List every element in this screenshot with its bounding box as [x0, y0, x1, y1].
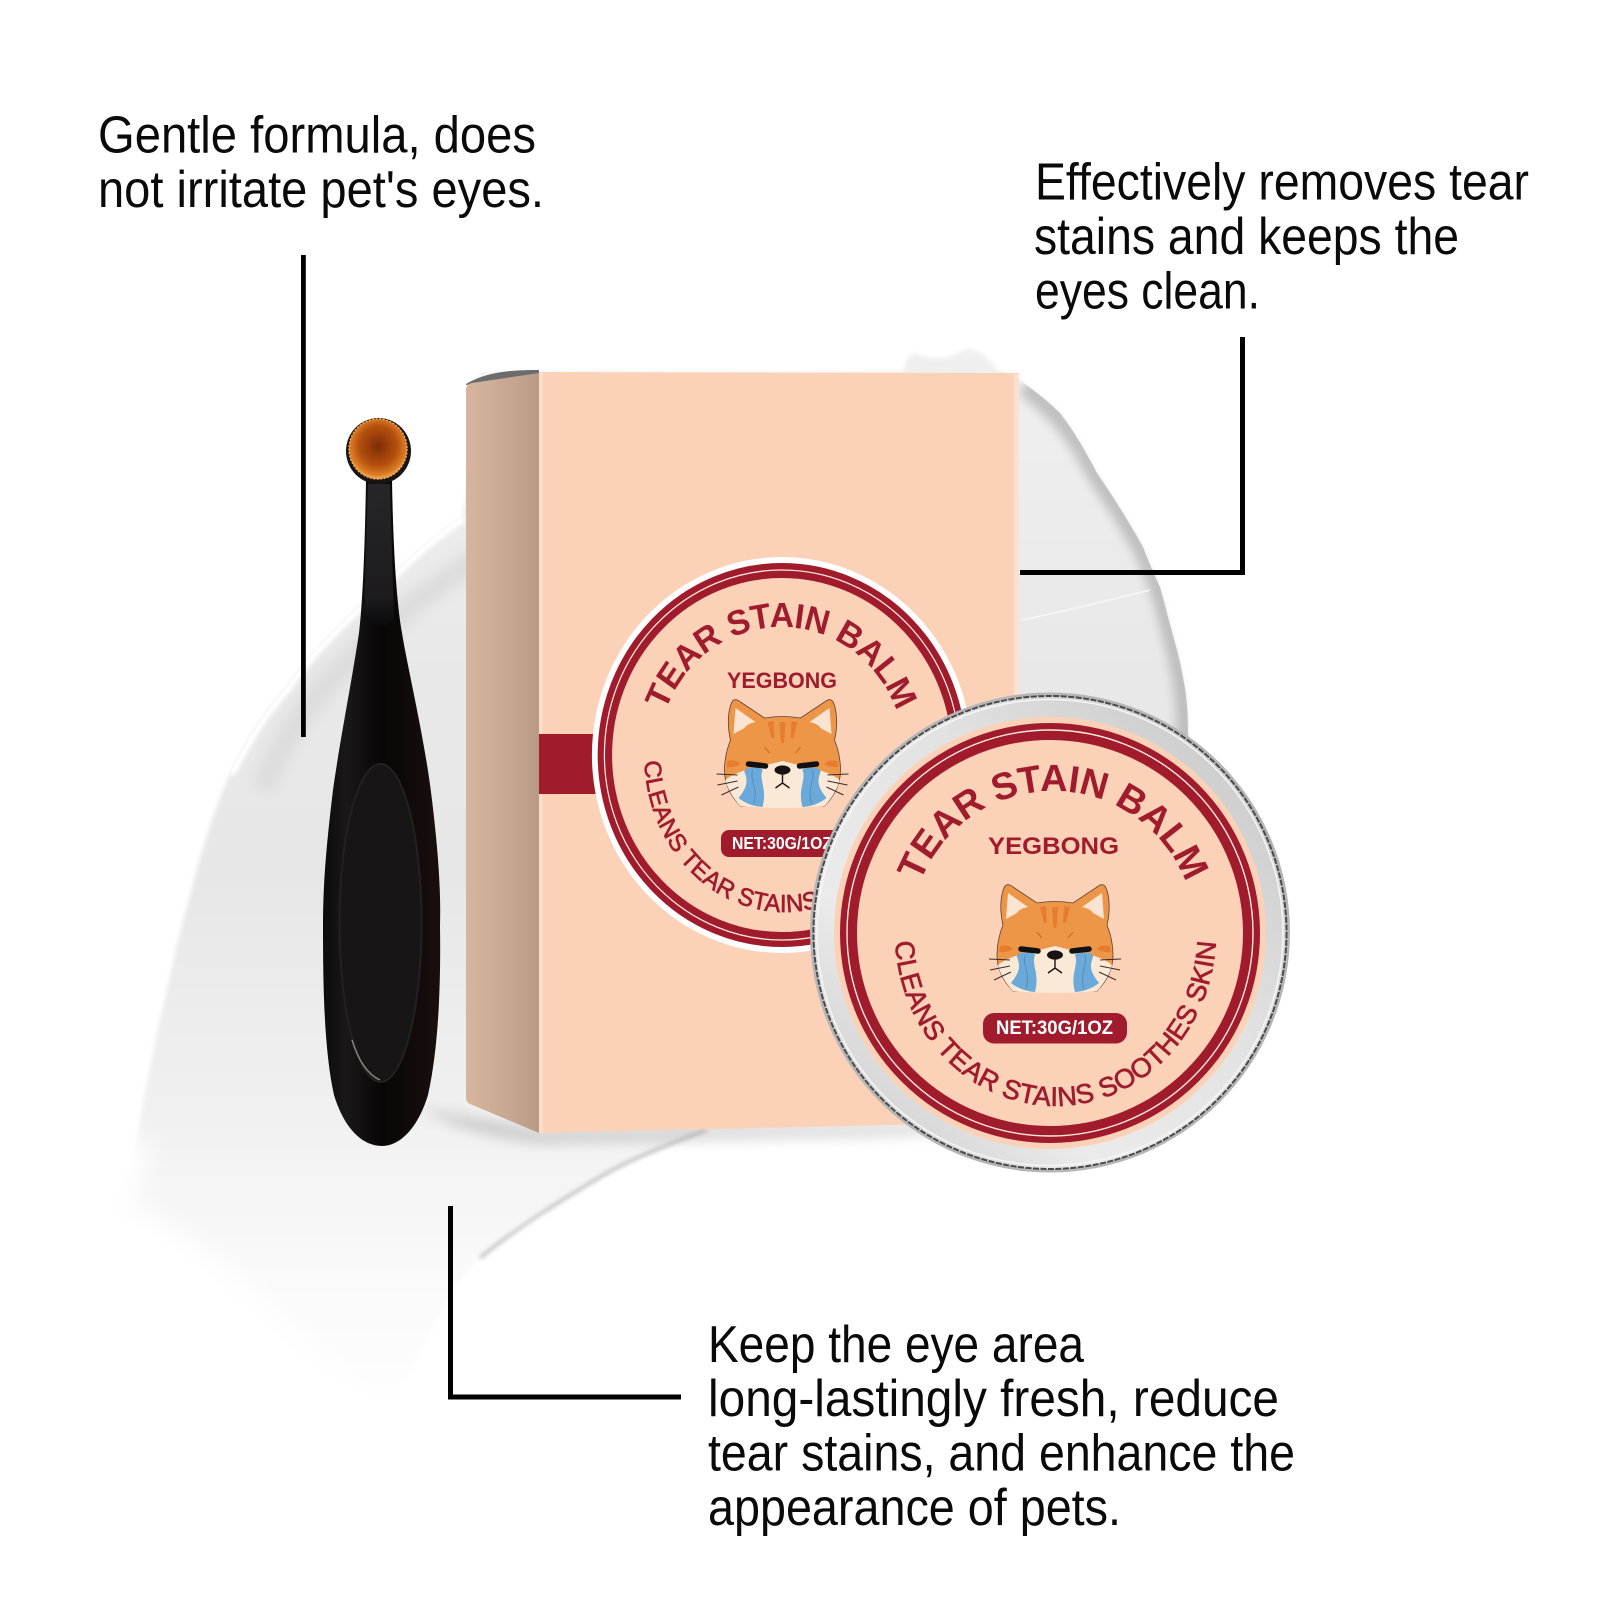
tin net weight: NET:30G/1OZ: [996, 1017, 1113, 1039]
box side face: [466, 373, 539, 1133]
callout 2 leader line: [1020, 337, 1242, 572]
callout 2 text: Effectively removes tear: [1035, 154, 1529, 212]
box top opening: [466, 370, 539, 385]
callout 3 text: appearance of pets.: [708, 1479, 1121, 1537]
brush handle: [323, 480, 440, 1146]
callout 1 heading: not irritate pet's eyes.: [98, 161, 544, 219]
box label tagline: CLEANS TEAR STAINS SOOTHES SKIN: [644, 761, 814, 913]
box net weight: [721, 830, 843, 857]
callout 1 heading: Gentle formula, does: [98, 106, 536, 164]
tin label rings: [847, 730, 1253, 1136]
tin brand: YEGBONG: [988, 833, 1119, 860]
box shadow: [420, 1108, 1020, 1142]
balm tin: [810, 692, 1290, 1172]
icon: crying cat on box: [716, 700, 848, 808]
callout 2 text: stains and keeps the: [1034, 208, 1459, 266]
box red band: [539, 734, 599, 794]
callout 3 text: long-lastingly fresh, reduce: [708, 1370, 1279, 1428]
box net weight: NET:30G/1OZ: [732, 833, 832, 853]
icon: crying cat on tin: [989, 885, 1121, 993]
tin title: TEAR STAIN BALM: [896, 764, 1209, 880]
applicator brush: [323, 418, 440, 1146]
tin label: [834, 717, 1266, 1149]
brush head: [346, 418, 411, 484]
callout 2 text: eyes clean.: [1035, 262, 1260, 320]
callout 3 text: Keep the eye area: [708, 1316, 1084, 1374]
callout 3 leader line: [450, 1206, 681, 1397]
cream smear background: [140, 350, 1189, 1260]
box label: [592, 557, 966, 953]
tin metal rim: [810, 692, 1290, 1172]
callout 1 heading: [98, 106, 544, 219]
callout 2 text: [1034, 154, 1529, 320]
product box: [466, 370, 1019, 1133]
box label title: TEAR STAIN BALM: [644, 603, 917, 709]
callout 1 leader line: [301, 255, 306, 737]
brush grip pad: [340, 764, 422, 1082]
tin net weight: [983, 1013, 1127, 1044]
box front face: [539, 372, 1019, 1133]
box brand: YEGBONG: [727, 668, 837, 693]
callout 3 text: tear stains, and enhance the: [708, 1424, 1295, 1482]
tin tagline: CLEANS TEAR STAINS SOOTHES SKIN: [895, 942, 1216, 1106]
callout 3 text: [708, 1316, 1295, 1537]
